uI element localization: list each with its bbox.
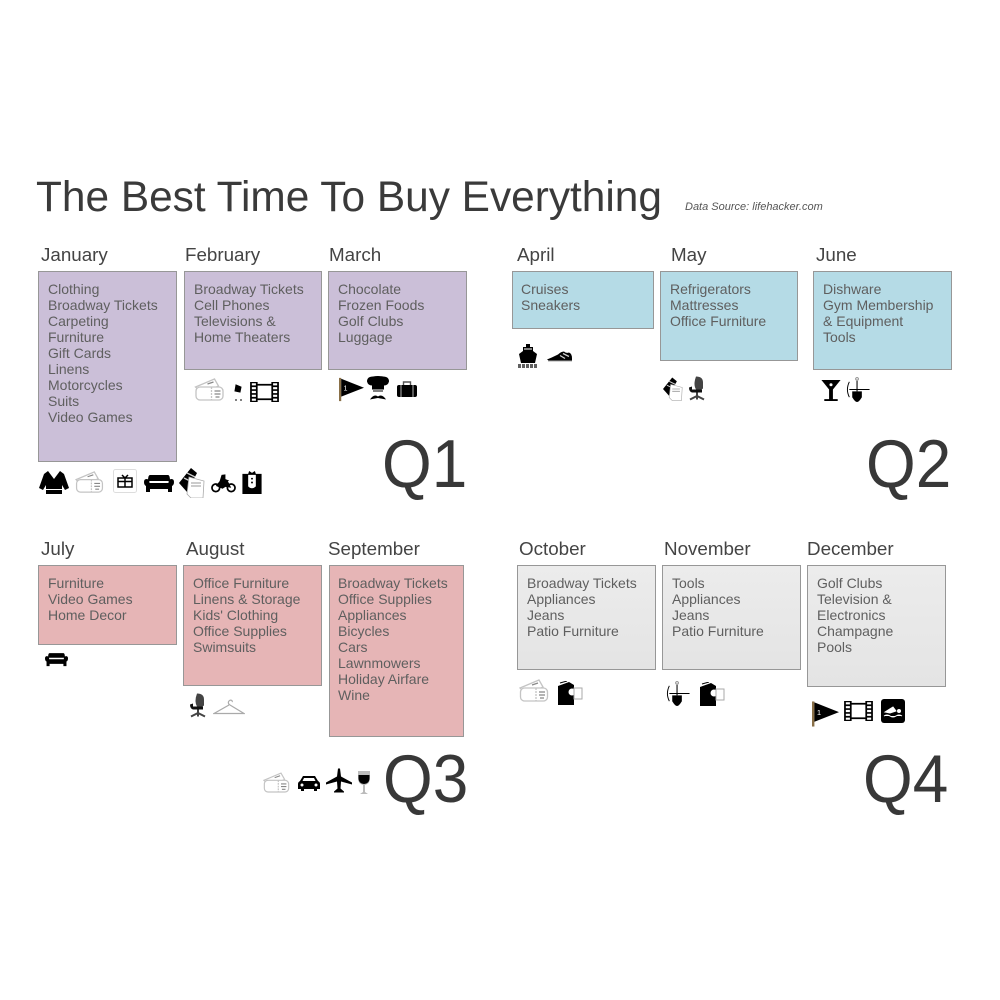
icon: motorcycle bbox=[212, 474, 235, 492]
month: April: Sneakers bbox=[521, 297, 580, 313]
icon: sofa bbox=[45, 653, 68, 666]
month: May bbox=[660, 244, 798, 360]
icon: pennant bbox=[812, 701, 839, 727]
month: November bbox=[662, 538, 800, 670]
month: March: Frozen Foods bbox=[338, 297, 424, 313]
month: June bbox=[814, 244, 952, 370]
month: September: September bbox=[328, 538, 420, 559]
icon: office chair bbox=[190, 694, 205, 716]
month: January: Clothing bbox=[48, 281, 99, 297]
month: December bbox=[807, 538, 946, 686]
icon: tools bbox=[667, 682, 690, 706]
month: February: Broadway Tickets bbox=[194, 281, 304, 297]
month: December: Pools bbox=[817, 639, 852, 655]
icon: appliance bbox=[700, 682, 724, 706]
month: September: Lawnmowers bbox=[338, 655, 420, 671]
icon: tickets bbox=[264, 773, 289, 792]
icon: film bbox=[251, 382, 278, 402]
month: September bbox=[328, 538, 464, 736]
month: March: Luggage bbox=[338, 329, 393, 345]
month: August: Office Supplies bbox=[193, 623, 287, 639]
month: July: Furniture bbox=[48, 575, 104, 591]
month: January: January bbox=[41, 244, 108, 265]
month: January bbox=[38, 244, 176, 462]
month: November: Appliances bbox=[672, 591, 740, 607]
icon: tickets bbox=[196, 379, 223, 400]
month: October: Broadway Tickets bbox=[527, 575, 637, 591]
month: March bbox=[328, 244, 466, 370]
month: February bbox=[184, 244, 322, 370]
month: July: Home Decor bbox=[48, 607, 127, 623]
month: January: Suits bbox=[48, 393, 79, 409]
month: April bbox=[512, 244, 654, 328]
icon: hanger bbox=[214, 700, 244, 714]
month: December: Television & bbox=[817, 591, 892, 607]
Q1 label: Q1 bbox=[382, 425, 467, 501]
month: September: Broadway Tickets bbox=[338, 575, 448, 591]
month: November: November bbox=[664, 538, 751, 559]
month: January: Motorcycles bbox=[48, 377, 123, 393]
month: August: Kids' Clothing bbox=[193, 607, 278, 623]
title: The Best Time To Buy Everything bbox=[36, 173, 662, 220]
month: March: March bbox=[329, 244, 381, 265]
data source: Data Source: lifehacker.com bbox=[685, 201, 823, 213]
month: December: December bbox=[807, 538, 894, 559]
Q2 label: Q2 bbox=[866, 425, 951, 501]
panel: Q3 bbox=[38, 538, 468, 816]
month: October: Jeans bbox=[527, 607, 564, 623]
month: July bbox=[38, 538, 176, 644]
month: October: October bbox=[519, 538, 586, 559]
month: January: Furniture bbox=[48, 329, 104, 345]
icon: suit bbox=[242, 471, 262, 494]
month: July: July bbox=[41, 538, 75, 559]
icon: tools bbox=[847, 378, 870, 402]
icon: office chair bbox=[689, 376, 704, 400]
month: November: Patio Furniture bbox=[672, 623, 764, 639]
month: August: August bbox=[186, 538, 245, 559]
icon: martini bbox=[821, 380, 841, 401]
month: June: & Equipment bbox=[823, 313, 903, 329]
month: October: Patio Furniture bbox=[527, 623, 619, 639]
month: February: February bbox=[185, 244, 261, 265]
month: September: Office Supplies bbox=[338, 591, 432, 607]
icon: pennant bbox=[339, 378, 364, 401]
month: February: Cell Phones bbox=[194, 297, 270, 313]
month: September: Holiday Airfare bbox=[338, 671, 429, 687]
month: July: Video Games bbox=[48, 591, 133, 607]
month: August: Linens & Storage bbox=[193, 591, 301, 607]
icon: car bbox=[298, 776, 320, 791]
month: November: Jeans bbox=[672, 607, 709, 623]
icon: tickets bbox=[520, 680, 548, 701]
month: February: Televisions & bbox=[194, 313, 276, 329]
icon: sweater bbox=[39, 471, 69, 494]
icon: wine bbox=[358, 771, 370, 794]
month: May: Refrigerators bbox=[670, 281, 751, 297]
month: January: Video Games bbox=[48, 409, 133, 425]
month: August: Swimsuits bbox=[193, 639, 256, 655]
month: January: Broadway Tickets bbox=[48, 297, 158, 313]
icon: mattress book bbox=[663, 377, 682, 401]
icon: tickets bbox=[76, 472, 102, 492]
month: December: Champagne bbox=[817, 623, 893, 639]
icon: plane bbox=[326, 768, 352, 792]
panel: Q4 bbox=[518, 538, 948, 816]
month: April: April bbox=[517, 244, 555, 265]
icon: luggage bbox=[397, 382, 417, 397]
month: December: Golf Clubs bbox=[817, 575, 882, 591]
month: June: June bbox=[816, 244, 857, 265]
icon: film bbox=[845, 701, 872, 721]
month: May: Mattresses bbox=[670, 297, 738, 313]
Q4 label: Q4 bbox=[863, 740, 948, 816]
month: January: Carpeting bbox=[48, 313, 109, 329]
month: June: Tools bbox=[823, 329, 856, 345]
month: September: Bicycles bbox=[338, 623, 389, 639]
icon: linens book bbox=[179, 468, 204, 498]
month: June: Dishware bbox=[823, 281, 882, 297]
icon: cell phone bbox=[235, 385, 241, 401]
panel: Q2 bbox=[512, 244, 952, 501]
month: March: Golf Clubs bbox=[338, 313, 403, 329]
icon: swimming bbox=[881, 699, 905, 723]
icon: sofa bbox=[144, 475, 174, 492]
month: April: Cruises bbox=[521, 281, 568, 297]
month: October: Appliances bbox=[527, 591, 596, 607]
month: January: Gift Cards bbox=[48, 345, 111, 361]
month: June: Gym Membership bbox=[823, 297, 934, 313]
month: September: Appliances bbox=[338, 607, 406, 623]
icon: gift bbox=[114, 470, 136, 492]
month: December: Electronics bbox=[817, 607, 885, 623]
month: February: Home Theaters bbox=[194, 329, 290, 345]
month: October bbox=[518, 538, 656, 670]
month: November: Tools bbox=[672, 575, 705, 591]
month: September: Wine bbox=[338, 687, 370, 703]
month: September: Cars bbox=[338, 639, 368, 655]
month: August: Office Furniture bbox=[193, 575, 289, 591]
month: May: Office Furniture bbox=[670, 313, 766, 329]
month: May: May bbox=[671, 244, 707, 265]
month: August bbox=[184, 538, 322, 686]
Q3 label: Q3 bbox=[383, 740, 468, 816]
icon: ship bbox=[518, 344, 538, 367]
icon: sneaker bbox=[547, 352, 572, 362]
icon: appliance bbox=[558, 681, 582, 705]
month: January: Linens bbox=[48, 361, 89, 377]
month: March: Chocolate bbox=[338, 281, 401, 297]
panel: Q1 bbox=[38, 244, 467, 501]
icon: chef bbox=[367, 376, 389, 400]
